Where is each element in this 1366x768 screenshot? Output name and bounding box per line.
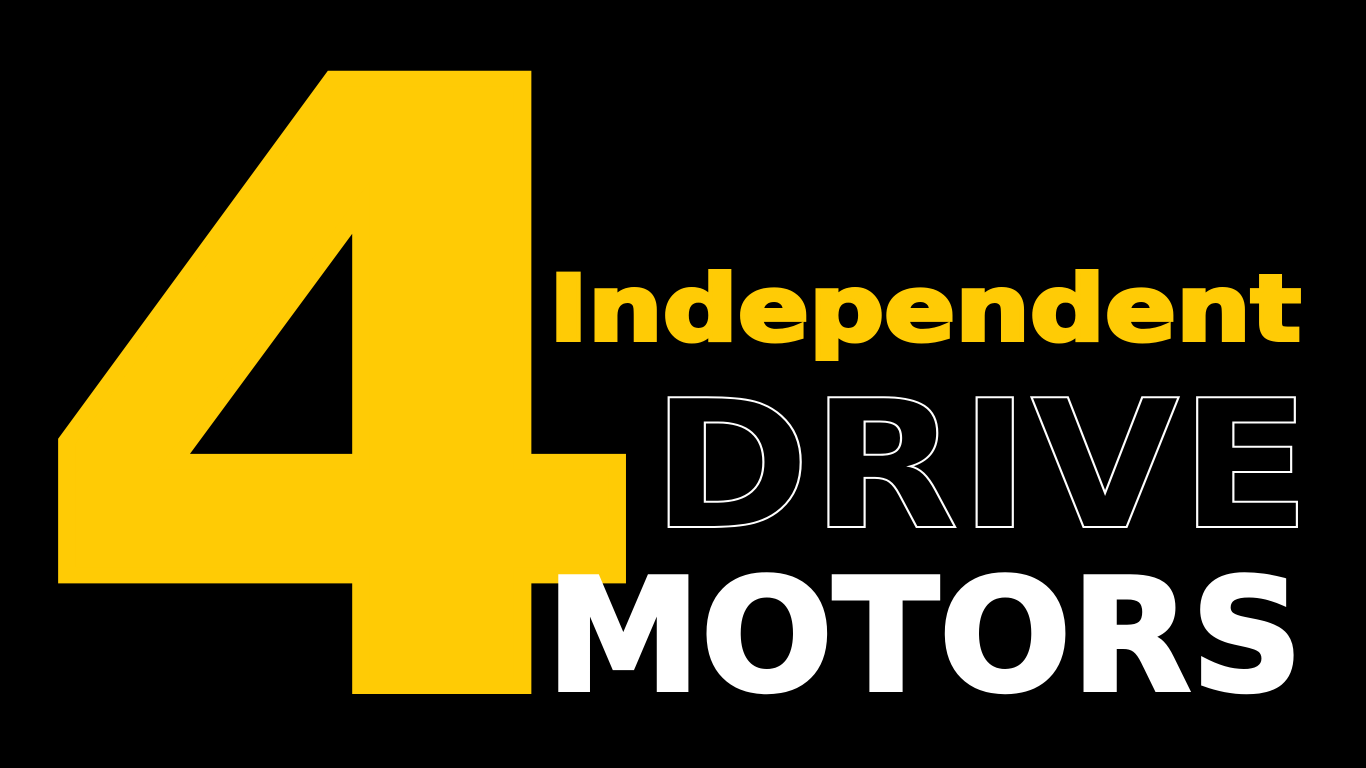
heading word: DRIVE (outlined): DRIVE xyxy=(651,362,1311,569)
heading word: MOTORS: MOTORS xyxy=(546,545,1303,727)
heading word: Independent: Independent xyxy=(549,257,1301,362)
